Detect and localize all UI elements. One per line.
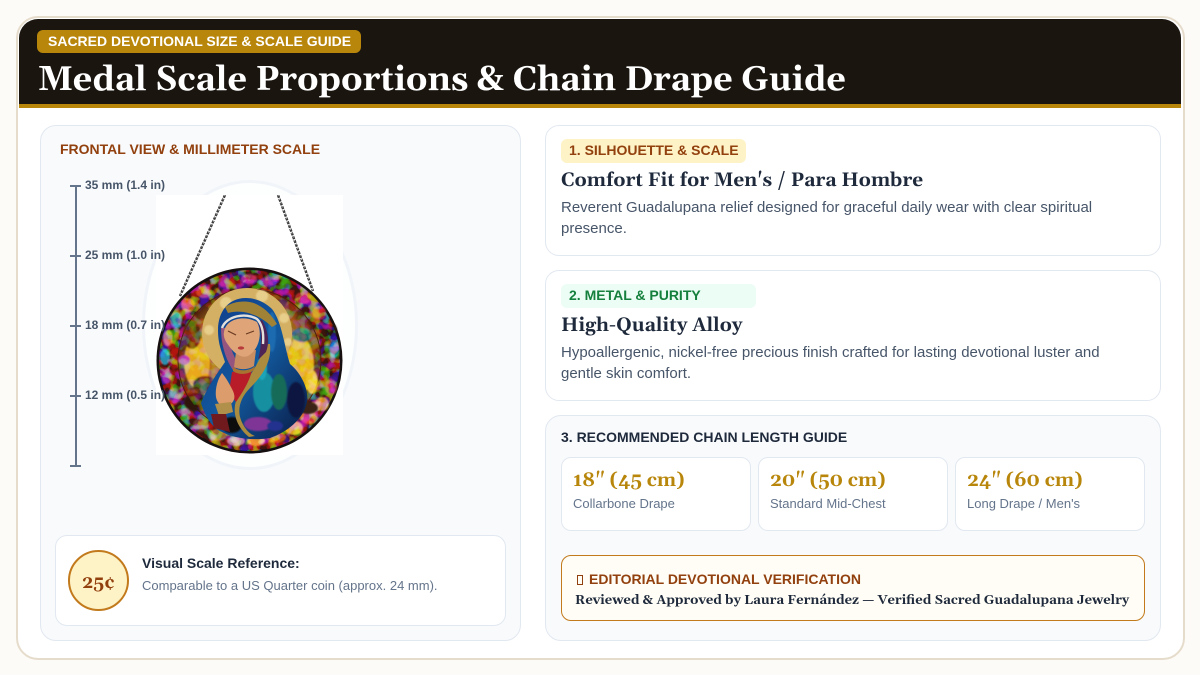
scale axis line bbox=[75, 185, 77, 466]
red dress bbox=[229, 370, 252, 402]
badge: metal and purity: 2. METAL & PURITY bbox=[569, 287, 701, 303]
chain option 18 inch: 18" (45 cm) bbox=[573, 469, 685, 493]
face bbox=[224, 318, 260, 357]
chain option 24 inch: 24" (60 cm) bbox=[967, 469, 1083, 493]
golden halo bbox=[202, 288, 292, 378]
vertical scale ruler bbox=[75, 187, 77, 465]
veil gold trim bbox=[235, 344, 270, 437]
text: alloy description: Hypoallergenic, nickel-free precious finish crafted for lasting devotional luster and gentle skin comfort. bbox=[561, 344, 1100, 382]
chain option 18 inch: Collarbone Drape bbox=[573, 496, 675, 511]
header badge: SACRED DEVOTIONAL SIZE & SCALE GUIDE bbox=[48, 33, 351, 49]
icon: quarter coin bbox=[68, 550, 129, 611]
panel: recommended chain length guide bbox=[545, 415, 1161, 641]
text: comfort fit: Reverent Guadalupana relief designed for graceful daily wear with clear spiritual presence. bbox=[561, 199, 1092, 237]
praying hands bbox=[216, 373, 234, 406]
icon: quarter coin: 25¢ bbox=[82, 572, 115, 595]
scale label 18 mm: 18 mm (0.7 in) bbox=[85, 318, 165, 332]
white veil edge bbox=[222, 316, 263, 344]
panel heading: frontal view: FRONTAL VIEW & MILLIMETER SCALE bbox=[60, 141, 320, 157]
chain option 24 inch bbox=[955, 457, 1145, 531]
chain right bbox=[278, 195, 313, 291]
callout: editorial verification bbox=[561, 555, 1145, 621]
robe bbox=[201, 298, 307, 439]
scale label 12 mm: 12 mm (0.5 in) bbox=[85, 388, 165, 402]
verification text: Reviewed & Approved by Laura Fernández — Verified Sacred Guadalupana Jewelry bbox=[575, 593, 1129, 609]
chain option 24 inch: Long Drape / Men's bbox=[967, 496, 1080, 511]
heading: comfort fit: Comfort Fit for Men's / Para Hombre bbox=[561, 169, 923, 193]
chain option 20 inch: Standard Mid-Chest bbox=[770, 496, 886, 511]
heading: high quality alloy: High-Quality Alloy bbox=[561, 314, 742, 338]
card: visual scale reference bbox=[55, 535, 506, 626]
neck bbox=[234, 350, 256, 369]
header banner bbox=[19, 19, 1181, 108]
chain guide heading: 3. RECOMMENDED CHAIN LENGTH GUIDE bbox=[561, 429, 847, 445]
card: silhouette and scale bbox=[545, 125, 1161, 256]
panel: frontal view and millimeter scale bbox=[40, 125, 521, 641]
medal image bbox=[156, 195, 343, 455]
medal disc bbox=[156, 265, 343, 455]
scale label 35 mm: 35 mm (1.4 in) bbox=[85, 178, 165, 192]
scale label 25 mm: 25 mm (1.0 in) bbox=[85, 248, 165, 262]
chain option 18 inch bbox=[561, 457, 751, 531]
badge: metal and purity bbox=[561, 284, 756, 308]
card: metal and purity bbox=[545, 270, 1161, 401]
coin reference heading: Visual Scale Reference: bbox=[142, 555, 300, 571]
purple inner veil bbox=[221, 328, 240, 370]
badge: silhouette and scale: 1. SILHOUETTE & SCALE bbox=[569, 142, 739, 158]
header badge bbox=[37, 30, 361, 53]
coin reference text: Comparable to a US Quarter coin (approx. 24 mm). bbox=[142, 578, 438, 593]
badge: silhouette and scale bbox=[561, 139, 746, 163]
title: Medal Scale Proportions & Chain Drape Guide bbox=[38, 58, 846, 102]
chain option 20 inch bbox=[758, 457, 948, 531]
verification heading: EDITORIAL DEVOTIONAL VERIFICATION bbox=[589, 571, 861, 587]
chain left bbox=[180, 195, 225, 296]
medal halo ellipse bbox=[142, 180, 358, 470]
inner gold field bbox=[178, 288, 322, 432]
chain option 20 inch: 20" (50 cm) bbox=[770, 469, 886, 493]
